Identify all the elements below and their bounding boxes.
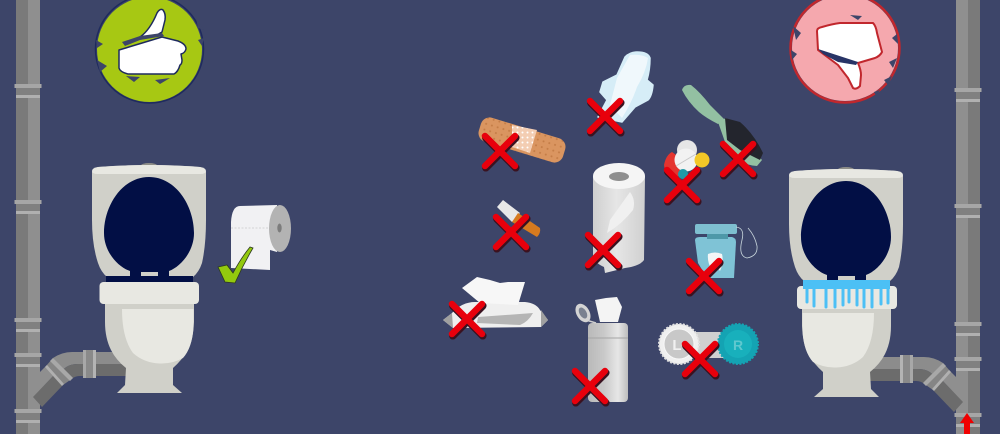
item: contact lens case: [659, 324, 758, 376]
red up arrow: [960, 413, 974, 434]
item: wet wipes pack: [443, 277, 548, 336]
item: wipes canister: [572, 297, 628, 403]
item: sanitary pad: [590, 52, 653, 133]
item: bandage: [476, 115, 568, 168]
right vertical drain pipe: [954, 0, 982, 434]
item: cigarette: [496, 200, 540, 249]
item: paper towel roll: [588, 163, 645, 273]
cross: [685, 344, 716, 376]
right toilet overflowing: [789, 167, 903, 397]
green check mark: [218, 247, 253, 283]
right branch pipe: [870, 355, 963, 412]
toilet paper roll: [231, 205, 291, 270]
cross: [590, 101, 621, 133]
item: contact lens case: R: [733, 337, 743, 353]
thumbs up badge: [96, 0, 204, 103]
left toilet: [92, 163, 206, 393]
cross: [496, 217, 527, 249]
cross: [575, 371, 606, 403]
cross: [485, 136, 516, 168]
thumbs down badge: [790, 0, 900, 102]
left branch pipe: [33, 350, 126, 407]
item: pills: [664, 140, 710, 202]
cross: [588, 235, 619, 267]
cross: [667, 170, 698, 202]
cross: [689, 261, 720, 293]
left vertical drain pipe: [14, 0, 42, 434]
item: hairbrush: [682, 85, 763, 176]
item: dental floss: [689, 224, 757, 293]
overflowing water: [803, 280, 890, 307]
cross: [452, 304, 483, 336]
cross: [723, 144, 754, 176]
item: contact lens case: L: [672, 337, 682, 354]
